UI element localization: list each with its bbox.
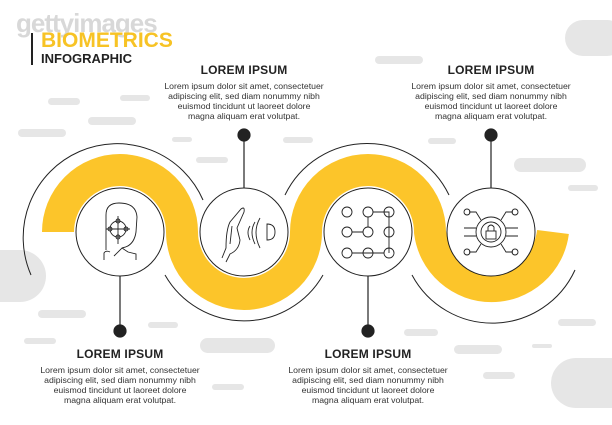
- text block 1 (top left): LOREM IPSUM: [201, 63, 287, 77]
- text block 2 (top right): Lorem ipsum dolor sit amet, consectetuer: [411, 81, 571, 91]
- text block 3 (bottom left): LOREM IPSUM: [77, 347, 163, 361]
- text block 2 (top right): magna aliquam erat volutpat.: [435, 111, 547, 121]
- text block 3 (bottom left): magna aliquam erat volutpat.: [64, 395, 176, 405]
- text block 4 (bottom right): euismod tincidunt ut laoreet dolore: [302, 385, 434, 395]
- watermark: gettyimages: [16, 8, 157, 38]
- text block 2 (top right): adipiscing elit, sed diam nonummy nibh: [415, 91, 567, 101]
- text block 1 (top left): Lorem ipsum dolor sit amet, consectetuer: [164, 81, 324, 91]
- title: INFOGRAPHIC: [41, 51, 132, 66]
- circle: face: [76, 188, 164, 276]
- text block 3 (bottom left): [40, 347, 200, 405]
- text block 4 (bottom right): LOREM IPSUM: [325, 347, 411, 361]
- circle: hand wave: [200, 188, 288, 276]
- title: BIOMETRICS: [41, 29, 173, 52]
- text block 1 (top left): adipiscing elit, sed diam nonummy nibh: [168, 91, 320, 101]
- thin outer arcs: [23, 143, 575, 323]
- text block 2 (top right): LOREM IPSUM: [448, 63, 534, 77]
- text block 2 (top right): [411, 63, 571, 121]
- text block 2 (top right): euismod tincidunt ut laoreet dolore: [425, 101, 557, 111]
- text block 4 (bottom right): magna aliquam erat volutpat.: [312, 395, 424, 405]
- text block 4 (bottom right): Lorem ipsum dolor sit amet, consectetuer: [288, 365, 448, 375]
- circle: pattern lock: [324, 188, 412, 276]
- text block 1 (top left): euismod tincidunt ut laoreet dolore: [178, 101, 310, 111]
- text block 1 (top left): magna aliquam erat volutpat.: [188, 111, 300, 121]
- text block 3 (bottom left): adipiscing elit, sed diam nonummy nibh: [44, 375, 196, 385]
- title: [31, 29, 173, 66]
- text block 1 (top left): [164, 63, 324, 121]
- text block 4 (bottom right): adipiscing elit, sed diam nonummy nibh: [292, 375, 444, 385]
- text block 3 (bottom left): euismod tincidunt ut laoreet dolore: [54, 385, 186, 395]
- circle: lock network: [447, 188, 535, 276]
- text block 3 (bottom left): Lorem ipsum dolor sit amet, consectetuer: [40, 365, 200, 375]
- connectors: [114, 129, 497, 337]
- yellow wave: [58, 170, 553, 294]
- text block 4 (bottom right): [288, 347, 448, 405]
